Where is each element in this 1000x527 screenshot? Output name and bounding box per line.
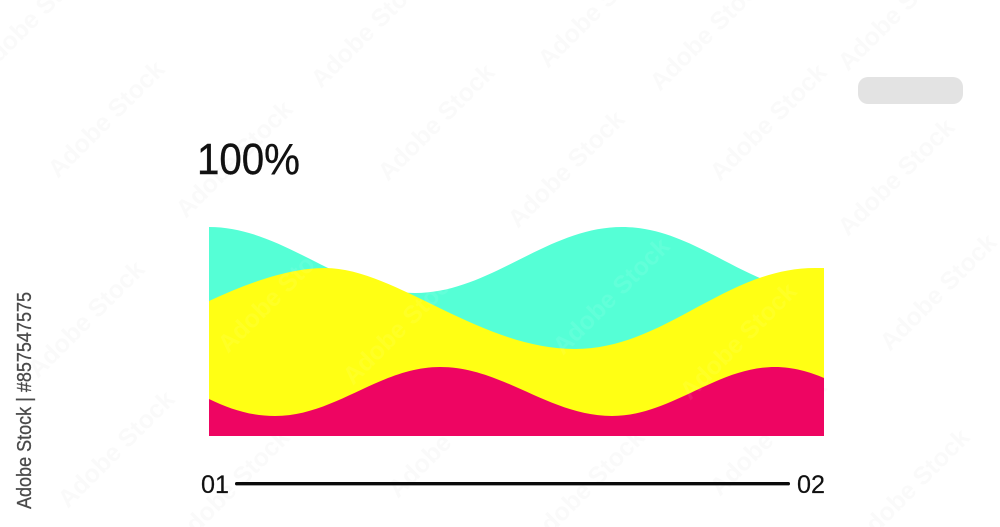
watermarks: Adobe Stock [22, 255, 150, 383]
watermarks: Adobe Stock [704, 373, 832, 501]
heading: 100%: 100% [197, 135, 300, 184]
watermarks: Adobe Stock [52, 385, 180, 513]
grey pill placeholder [858, 77, 963, 104]
watermarks: Adobe Stock [832, 113, 960, 241]
axis end label: 02 [797, 471, 825, 499]
watermarks: Adobe Stock [704, 58, 832, 186]
magenta wave area [209, 367, 824, 436]
chart watermarks: Adobe Stock [212, 230, 340, 358]
wave chart [209, 227, 824, 436]
chart watermarks: Adobe Stock [337, 262, 465, 390]
yellow wave area [209, 268, 824, 436]
watermarks: Adobe Stock [170, 95, 298, 223]
chart watermarks: Adobe Stock [674, 277, 802, 405]
stock id vertical text: Adobe Stock | #857547575 [14, 292, 36, 509]
chart watermarks [212, 230, 802, 405]
chart watermarks: Adobe Stock [547, 232, 675, 360]
axis start label: 01 [201, 471, 229, 499]
watermarks: Adobe Stock [382, 375, 510, 503]
watermarks: Adobe Stock [372, 58, 500, 186]
watermarks: Adobe Stock [42, 55, 170, 183]
watermarks: Adobe Stock [502, 105, 630, 233]
teal wave area [209, 227, 824, 436]
axis line [235, 482, 790, 485]
watermarks: Adobe Stock [874, 228, 1000, 356]
axis timeline [201, 471, 825, 499]
